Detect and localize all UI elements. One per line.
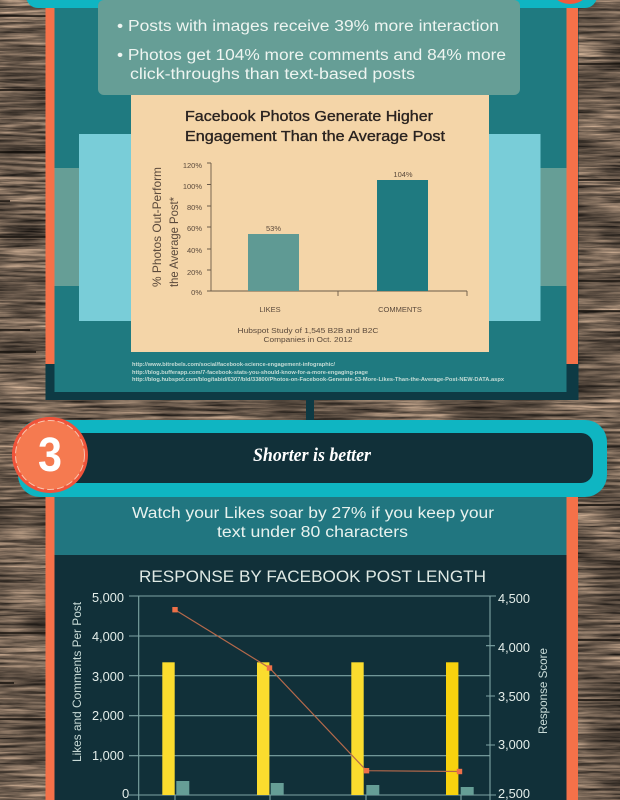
panel: key statistics xyxy=(98,0,520,95)
y axis labels: 40% xyxy=(187,246,202,255)
badge: number 3: 3 xyxy=(38,429,62,482)
intro text: text under 80 characters xyxy=(217,524,408,541)
chart title: Engagement Than the Average Post xyxy=(185,128,446,145)
grid and axes xyxy=(129,596,496,800)
chart title: Facebook Photos Generate Higher xyxy=(185,108,433,125)
intro text: Watch your Likes soar by 27% if you keep your xyxy=(132,505,494,522)
left axis labels: 2,000 xyxy=(92,708,124,723)
left axis labels: 5,000 xyxy=(92,590,124,605)
y axis title xyxy=(150,167,181,287)
decorative band: sage xyxy=(54,168,566,286)
y axis labels: 80% xyxy=(187,203,202,212)
bar chart axes xyxy=(207,163,467,296)
right axis labels xyxy=(498,591,530,800)
y axis labels: 60% xyxy=(187,224,202,233)
y axis title: the Average Post* xyxy=(167,197,181,287)
chart title: RESPONSE BY FACEBOOK POST LENGTH xyxy=(139,567,486,586)
left axis labels xyxy=(92,590,129,800)
y axis labels: 120% xyxy=(183,161,202,170)
y axis labels: 20% xyxy=(187,268,202,277)
green bars xyxy=(176,781,474,795)
text: bullet two xyxy=(117,47,506,83)
response score line xyxy=(172,607,462,774)
connector xyxy=(306,400,314,422)
source links: http://www.bitrebels.com/social/facebook-science-engagement-infographic/ xyxy=(132,362,336,368)
left axis labels: 4,000 xyxy=(92,629,124,644)
y axis labels xyxy=(183,161,202,297)
heading: Shorter is better xyxy=(253,445,372,466)
y axis title: % Photos Out-Perform xyxy=(150,167,164,287)
chart title xyxy=(185,108,446,145)
source note xyxy=(238,326,379,344)
badge: number 3 xyxy=(12,417,88,493)
right axis labels: 3,000 xyxy=(498,737,530,752)
source note: Hubspot Study of 1,545 B2B and B2C xyxy=(238,326,379,335)
bar: likes 53% xyxy=(248,224,299,314)
left axis labels: 1,000 xyxy=(92,748,124,763)
bar: likes 53%: 53% xyxy=(266,224,281,233)
bar: comments 104%: 104% xyxy=(393,170,413,179)
y axis labels: 100% xyxy=(183,182,202,191)
text: bullet two: click-throughs than text-based posts xyxy=(130,66,415,83)
source note: Companies in Oct. 2012 xyxy=(264,335,352,344)
source links: http://blog.hubspot.com/blog/tabid/6307/bId/33800/Photos-on-Facebook-Generate-53-More-Likes-Than-the-Average-Post-NEW-DATA.aspx xyxy=(132,377,504,383)
response chart xyxy=(70,590,550,800)
bar: comments 104%: COMMENTS xyxy=(378,305,422,314)
top teal banner with badge xyxy=(26,0,598,8)
left axis title: Likes and Comments Per Post xyxy=(70,601,84,762)
decorative panel: light blue xyxy=(79,134,540,321)
right axis title: Response Score xyxy=(536,648,550,734)
source links xyxy=(132,362,504,383)
bar: likes 53%: LIKES xyxy=(259,305,281,314)
right axis labels: 4,500 xyxy=(498,591,530,606)
right axis labels: 3,500 xyxy=(498,689,530,704)
intro text xyxy=(132,505,494,541)
panel: section 2 body xyxy=(46,0,578,400)
source links: http://blog.bufferapp.com/7-facebook-stats-you-should-know-for-a-more-engaging-page xyxy=(132,370,368,376)
panel: section 3 body xyxy=(46,490,578,800)
y axis labels: 0% xyxy=(191,288,202,297)
left axis labels: 3,000 xyxy=(92,669,124,684)
text: bullet one: • Posts with images receive 39% more interaction xyxy=(117,18,499,35)
right axis labels: 4,000 xyxy=(498,640,530,655)
bar: comments 104% xyxy=(377,170,428,314)
panel: facebook photos chart xyxy=(131,95,489,352)
section 3 header xyxy=(12,417,607,497)
text: bullet two: • Photos get 104% more comments and 84% more xyxy=(117,47,506,64)
yellow bars xyxy=(162,662,458,795)
